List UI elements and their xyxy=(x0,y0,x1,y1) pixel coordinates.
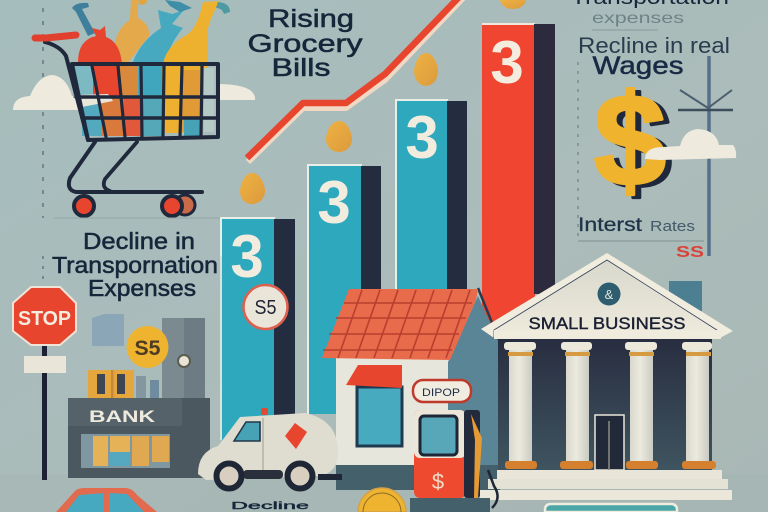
text: transportation expenses top right: expenses xyxy=(592,10,684,27)
shop awning xyxy=(346,365,402,388)
text: interest rates: Interst xyxy=(578,215,643,236)
cloud: left xyxy=(13,75,255,110)
heading: rising grocery bills: Grocery xyxy=(248,30,363,58)
cloud: right xyxy=(645,129,736,160)
heading: decline in transportation expenses xyxy=(52,228,218,301)
fuel pump: DIPOP xyxy=(422,387,460,399)
bar 3: teal xyxy=(395,99,467,299)
text: interest rates: Rates xyxy=(650,218,695,235)
bar 3: teal: 3 xyxy=(405,104,439,171)
heading: rising grocery bills xyxy=(248,5,363,82)
text: decline bottom: Decline xyxy=(231,501,310,512)
price badge on bar 1: S5 xyxy=(254,297,276,319)
storefront shop xyxy=(322,288,501,490)
coin on bank xyxy=(126,326,168,368)
text: interest rates: SS xyxy=(676,244,704,261)
car bottom left xyxy=(56,488,157,512)
bank building: small business: SMALL BUSINESS xyxy=(528,314,686,333)
heading: decline in transportation expenses: Transpornation xyxy=(52,252,218,278)
bar 2: teal xyxy=(307,164,381,414)
bar 1: teal: 3 xyxy=(230,223,264,290)
heading: decline in transportation expenses: Decline in xyxy=(83,228,195,254)
dashed guide lines xyxy=(43,8,578,282)
fuel pump xyxy=(410,380,498,512)
heading: decline in transportation expenses: Expenses xyxy=(88,275,196,301)
shop window xyxy=(357,387,402,446)
icon: stop sign: STOP xyxy=(18,308,71,330)
text: decline in real wages: Recline in real xyxy=(578,33,730,58)
rising trend line arrow xyxy=(247,0,464,162)
coin bottom xyxy=(358,488,406,512)
heading: rising grocery bills: Rising xyxy=(268,5,354,33)
door xyxy=(595,415,624,470)
bank building: small business xyxy=(480,253,733,500)
van xyxy=(198,408,342,488)
cart wheels xyxy=(74,195,195,216)
bar 2: teal: 3 xyxy=(317,169,351,236)
steps xyxy=(497,470,722,479)
bank building: small business: & xyxy=(605,287,614,302)
icon: dollar sign: $ xyxy=(600,70,672,216)
pump sign xyxy=(413,380,471,402)
bar 4: red: 3 xyxy=(490,29,524,96)
fuel pump: $ xyxy=(432,469,444,494)
text: decline in real wages xyxy=(578,33,730,80)
price badge on bar 1 xyxy=(244,285,288,329)
icon: stop sign xyxy=(13,287,76,480)
bar 1: teal xyxy=(220,217,295,440)
icon: shopping cart with groceries xyxy=(35,0,230,216)
building: bank: S5 xyxy=(134,337,161,360)
pediment xyxy=(481,253,733,338)
cloud over cart xyxy=(78,94,113,107)
shop roof xyxy=(322,289,478,360)
icon: dollar sign: $ xyxy=(594,67,666,213)
columns xyxy=(504,342,716,469)
cart handle xyxy=(35,35,76,38)
utility pole xyxy=(678,56,733,256)
text: decline in real wages: Wages xyxy=(592,52,684,80)
heading: rising grocery bills: Bills xyxy=(272,54,330,82)
building: bank xyxy=(68,314,210,478)
bar 4: red xyxy=(482,23,555,333)
text: interest rates xyxy=(578,215,704,261)
basket and frame xyxy=(45,42,218,192)
groceries xyxy=(72,0,230,136)
sign bottom right xyxy=(545,504,677,512)
coins / drops xyxy=(240,0,526,204)
text: transportation expenses top right xyxy=(571,0,729,27)
building: bank: BANK xyxy=(89,407,156,426)
